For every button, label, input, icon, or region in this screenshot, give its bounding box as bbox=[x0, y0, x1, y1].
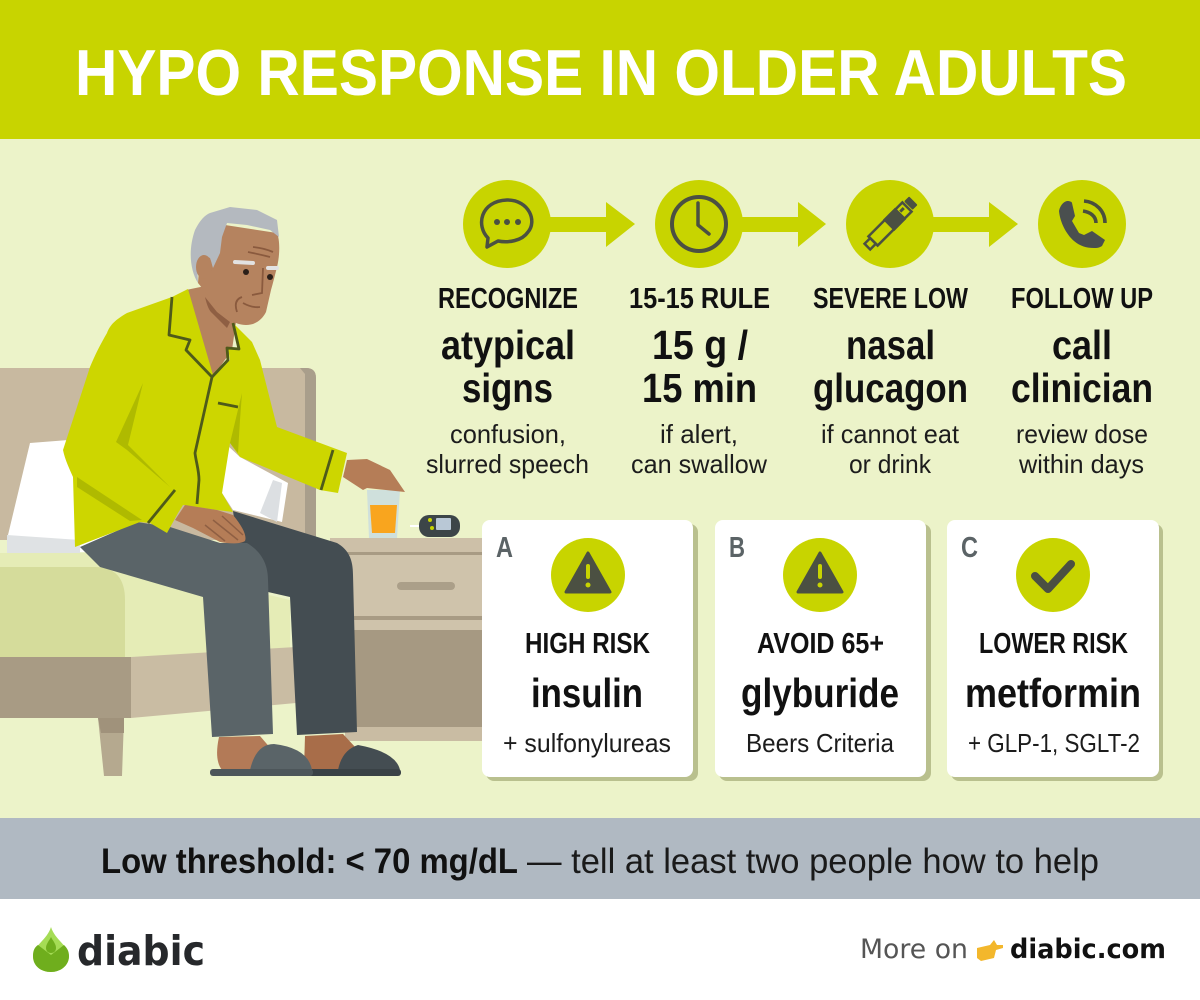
icon: speech bubble bbox=[463, 180, 551, 268]
label: LOWER RISK bbox=[979, 628, 1128, 660]
threshold text regular: — tell at least two people how to help bbox=[527, 842, 1099, 881]
detail: can swallow bbox=[631, 449, 767, 479]
ear bbox=[196, 255, 212, 279]
headline: nasal bbox=[846, 322, 935, 368]
detail: slurred speech bbox=[426, 449, 589, 479]
footer bbox=[0, 899, 1200, 1000]
step: follow up bbox=[1011, 180, 1153, 479]
glass of juice bbox=[367, 490, 400, 538]
icon: warning bbox=[783, 538, 857, 612]
pillow bbox=[7, 436, 288, 553]
headline bbox=[642, 322, 757, 411]
face bbox=[198, 225, 279, 325]
collar and piping bbox=[148, 297, 333, 523]
detail: if cannot eat bbox=[821, 419, 960, 449]
detail bbox=[426, 419, 589, 479]
threshold band bbox=[0, 818, 1200, 899]
headline bbox=[1011, 322, 1153, 411]
neck bbox=[186, 285, 236, 378]
more on text: More on bbox=[860, 934, 968, 965]
icon: clock bbox=[655, 180, 743, 268]
wrinkles and mouth bbox=[236, 247, 273, 312]
label: RECOGNIZE bbox=[438, 283, 578, 315]
card letter: A bbox=[496, 532, 513, 564]
step: 15-15 rule bbox=[629, 180, 770, 479]
detail: or drink bbox=[849, 449, 932, 479]
logo wordmark: diabic bbox=[77, 927, 205, 975]
far leg bbox=[233, 511, 357, 735]
sleeve shadows bbox=[77, 383, 242, 521]
detail bbox=[821, 419, 960, 479]
bed bbox=[0, 553, 296, 776]
detail: confusion, bbox=[450, 419, 566, 449]
drug: metformin bbox=[965, 670, 1141, 716]
card letter: B bbox=[729, 532, 745, 564]
pajama shirt bbox=[63, 289, 347, 547]
logo drop bbox=[33, 927, 69, 972]
head bbox=[191, 207, 279, 328]
detail: review dose bbox=[1016, 419, 1148, 449]
step: recognize bbox=[426, 180, 589, 479]
label: HIGH RISK bbox=[525, 628, 650, 660]
headline: 15 min bbox=[642, 365, 757, 411]
icon: check bbox=[1016, 538, 1090, 612]
headline bbox=[441, 322, 575, 411]
nightstand bbox=[330, 538, 482, 741]
illustration: older man on bed bbox=[0, 207, 482, 776]
detail: + GLP-1, SGLT-2 bbox=[968, 728, 1140, 758]
label: SEVERE LOW bbox=[813, 283, 969, 315]
step: severe low bbox=[813, 180, 969, 479]
label: FOLLOW UP bbox=[1011, 283, 1153, 315]
panel: card A high risk bbox=[482, 520, 698, 781]
headline: glucagon bbox=[813, 365, 968, 411]
label: 15-15 RULE bbox=[629, 283, 770, 315]
detail bbox=[1016, 419, 1148, 479]
headline: atypical bbox=[441, 322, 575, 368]
panel: card C lower risk bbox=[947, 520, 1163, 781]
drug: insulin bbox=[531, 670, 643, 716]
hand on glass bbox=[343, 459, 405, 492]
card letter: C bbox=[961, 532, 978, 564]
header banner bbox=[0, 0, 1200, 139]
headline: clinician bbox=[1011, 365, 1153, 411]
threshold text bold: Low threshold: < 70 mg/dL bbox=[101, 842, 518, 881]
hair bbox=[191, 207, 279, 283]
detail: within days bbox=[1018, 449, 1144, 479]
eyebrows and eyes bbox=[235, 262, 277, 268]
neck shadow bbox=[205, 297, 230, 328]
icon: warning bbox=[551, 538, 625, 612]
hand on knee bbox=[175, 505, 246, 543]
process arrows bbox=[548, 202, 1018, 247]
near leg bbox=[80, 522, 273, 737]
glucose meter bbox=[410, 515, 460, 537]
icon: pointing hand bbox=[977, 940, 1003, 961]
headline: call bbox=[1052, 322, 1112, 368]
detail: Beers Criteria bbox=[746, 728, 894, 758]
drug: glyburide bbox=[741, 670, 899, 716]
headline bbox=[813, 322, 968, 411]
label: AVOID 65+ bbox=[757, 628, 884, 660]
detail: if alert, bbox=[660, 419, 738, 449]
icon: phone bbox=[1038, 180, 1126, 268]
site link: diabic.com bbox=[1010, 934, 1166, 965]
far foot and slipper bbox=[300, 734, 401, 776]
panel: card B avoid 65+ bbox=[715, 520, 931, 781]
detail: + sulfonylureas bbox=[503, 728, 671, 758]
detail bbox=[631, 419, 767, 479]
icon: glucagon pen bbox=[846, 180, 934, 268]
headboard bbox=[0, 368, 316, 540]
near foot and slipper bbox=[210, 736, 313, 776]
headline: signs bbox=[462, 365, 553, 411]
headline: 15 g / bbox=[652, 322, 748, 368]
